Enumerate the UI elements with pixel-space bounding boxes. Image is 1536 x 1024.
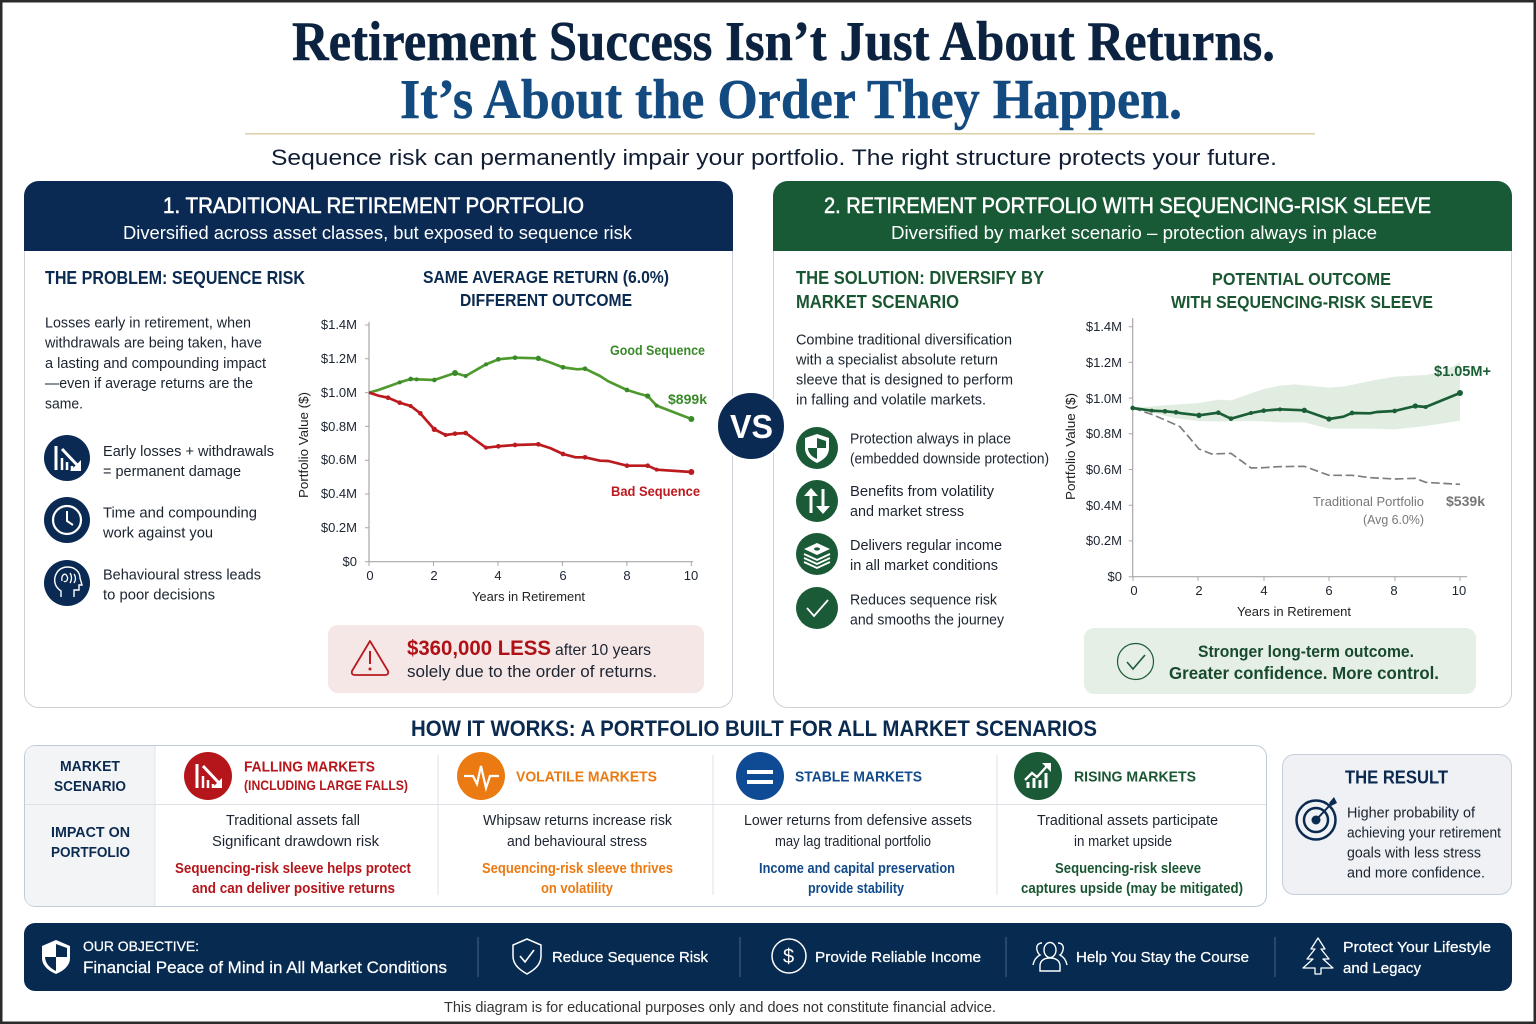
line chart: sleeve outcome: 0 (1130, 583, 1138, 598)
column: falling markets: and can deliver positive returns (192, 881, 395, 897)
row label: impact on portfolio: IMPACT ON (51, 825, 130, 841)
line chart: sleeve outcome: $0.4M (1086, 498, 1122, 513)
text: objective: OUR OBJECTIVE: (83, 938, 199, 954)
text block: problem description: Losses early in retirement, when (45, 316, 251, 332)
text: protection: (embedded downside protection) (850, 452, 1049, 468)
item: protect lifestyle and legacy (1303, 938, 1491, 977)
item: protect lifestyle and legacy: and Legacy (1343, 960, 1421, 977)
icon: check (796, 587, 838, 629)
line chart: good versus bad sequence: $0.8M (321, 419, 357, 434)
text: result description: goals with less stress (1347, 846, 1481, 862)
line chart: good versus bad sequence: $1.0M (321, 385, 357, 400)
line chart: sleeve outcome: (Avg 6.0%) (1363, 512, 1424, 527)
row label: market scenario: MARKET (60, 759, 120, 775)
text: behavioural stress (103, 568, 261, 604)
line chart: good versus bad sequence: 4 (494, 568, 502, 583)
column: stable markets: Income and capital preservation (759, 861, 955, 877)
text: benefits (850, 484, 995, 520)
item: reduce sequence risk: Reduce Sequence Risk (552, 949, 708, 966)
column: falling markets (175, 752, 411, 897)
panel: the result: THE RESULT (1345, 768, 1448, 788)
text: result description (1347, 806, 1501, 882)
text: early losses: = permanent damage (103, 464, 241, 480)
text: income (850, 538, 1002, 574)
column: volatile markets: Whipsaw returns increase risk (483, 813, 673, 829)
column: stable markets (736, 752, 972, 897)
text block: solution description (795, 332, 1013, 408)
line chart: sleeve outcome: $0.8M (1086, 426, 1122, 441)
item: reduce sequence risk (513, 939, 708, 974)
line chart: sleeve outcome: 10 (1452, 583, 1466, 598)
column: rising markets: in market upside (1074, 834, 1172, 850)
icon: circled check (1118, 644, 1154, 680)
row label: market scenario (54, 759, 126, 795)
text: time and compounding: work against you (102, 526, 213, 542)
panel header: sleeve (773, 181, 1512, 251)
VS badge: VS (730, 408, 773, 445)
line chart: sleeve outcome: $0.6M (1086, 462, 1122, 477)
line chart: good versus bad sequence: $0.4M (321, 486, 357, 501)
text block: solution description: sleeve that is designed to perform (796, 372, 1013, 388)
icon: falling chart (44, 435, 90, 481)
line chart: good versus bad sequence: Portfolio Value ($) (296, 392, 311, 498)
icon: target (1296, 797, 1337, 840)
text block: solution description: with a specialist absolute return (795, 352, 998, 368)
panel header: sleeve: 2. RETIREMENT PORTFOLIO WITH SEQUENCING-RISK SLEEVE (824, 193, 1431, 218)
subtitle: Sequence risk can permanently impair your portfolio. The right structure protects your future. (271, 145, 1277, 170)
item: provide reliable income: $ (783, 946, 794, 968)
text block: problem description: withdrawals are being taken, have (44, 336, 262, 352)
column: stable markets: may lag traditional portfolio (775, 834, 931, 850)
line chart: sleeve outcome: Portfolio Value ($) (1063, 393, 1078, 500)
text: early losses (103, 444, 274, 480)
icon: rising chart (1014, 752, 1062, 800)
text block: problem description: —even if average returns are the (45, 376, 253, 392)
item: help you stay the course (1033, 942, 1249, 971)
line chart: sleeve outcome: $1.2M (1086, 355, 1122, 370)
column: falling markets: Sequencing-risk sleeve helps protect (175, 861, 411, 877)
icon: objective shield (42, 940, 70, 974)
callout: stronger outcome (1084, 628, 1476, 694)
column: volatile markets: and behavioural stress (507, 834, 647, 850)
title: Retirement Success Isn’t Just About Returns. (292, 11, 1275, 73)
column: volatile markets: VOLATILE MARKETS (516, 768, 657, 786)
heading: potential outcome: POTENTIAL OUTCOME (1212, 269, 1391, 289)
line chart: sleeve outcome: $0 (1108, 569, 1122, 584)
line chart: good versus bad sequence: 2 (430, 568, 438, 583)
line chart: sleeve outcome: $1.4M (1086, 319, 1122, 334)
item: protect lifestyle and legacy: Protect Your Lifestyle (1343, 939, 1491, 956)
icon: head (44, 560, 90, 606)
line chart: good versus bad sequence (296, 317, 707, 604)
callout: stronger outcome: Stronger long-term outcome. (1198, 642, 1414, 661)
text: income: in all market conditions (850, 558, 998, 574)
item: provide reliable income (772, 939, 981, 973)
line chart: sleeve outcome (1063, 318, 1491, 619)
text: benefits: and market stress (850, 504, 964, 520)
heading: same average return: DIFFERENT OUTCOME (460, 290, 632, 310)
icon: volatile pulse (457, 752, 505, 800)
column: rising markets: Traditional assets participate (1037, 813, 1218, 829)
panel: traditional portfolio (24, 181, 733, 708)
text block: solution description: in falling and volatile markets. (796, 392, 986, 408)
text: reduces risk (850, 592, 1005, 628)
heading: the solution (796, 268, 1044, 312)
callout: 360,000 less (328, 625, 704, 693)
column: stable markets: Lower returns from defensive assets (744, 813, 972, 829)
icon: clock (44, 497, 90, 543)
line chart: good versus bad sequence: $0.2M (321, 520, 357, 535)
column: rising markets: captures upside (may be mitigated) (1021, 881, 1243, 897)
text: result description: Higher probability of (1347, 806, 1476, 822)
text: protection: Protection always in place (850, 432, 1011, 448)
column: stable markets: STABLE MARKETS (795, 768, 922, 786)
text: early losses: Early losses + withdrawals (103, 444, 274, 460)
text: time and compounding (102, 506, 257, 542)
column: falling markets: (INCLUDING LARGE FALLS) (244, 777, 408, 793)
panel header: sleeve: Diversified by market scenario – protection always in place (891, 223, 1377, 243)
callout: stronger outcome: Greater confidence. More control. (1169, 663, 1439, 683)
banner: our objective (24, 923, 1512, 991)
column: falling markets: Significant drawdown risk (212, 834, 380, 850)
text: reduces risk: and smooths the journey (850, 612, 1005, 628)
line chart: sleeve outcome: $1.0M (1086, 391, 1122, 406)
line chart: good versus bad sequence: 0 (366, 568, 374, 583)
line chart: good versus bad sequence: $899k (668, 391, 707, 407)
text: income: Delivers regular income (850, 538, 1002, 554)
column: rising markets (1014, 752, 1243, 897)
panel header: traditional (24, 181, 733, 251)
line chart: sleeve outcome: 8 (1390, 583, 1398, 598)
row label: market scenario: SCENARIO (54, 779, 126, 795)
text: reduces risk: Reduces sequence risk (850, 592, 998, 608)
column: falling markets: FALLING MARKETS (244, 758, 375, 776)
line chart: good versus bad sequence: Good Sequence (610, 343, 705, 358)
text: objective (83, 938, 447, 977)
panel: sequencing-risk sleeve portfolio (773, 181, 1512, 708)
text: benefits: Benefits from volatility (850, 484, 995, 500)
panel: the result (1282, 754, 1512, 894)
table: market scenarios (24, 746, 1266, 906)
callout: 360,000 less: after 10 years (555, 642, 651, 659)
heading: the solution: THE SOLUTION: DIVERSIFY BY (796, 268, 1044, 288)
line chart: good versus bad sequence: 6 (559, 568, 567, 583)
line chart: good versus bad sequence: Years in Retirement (472, 589, 585, 604)
heading: the problem: THE PROBLEM: SEQUENCE RISK (45, 268, 305, 288)
callout: 360,000 less: $360,000 LESS (407, 637, 551, 660)
item: provide reliable income: Provide Reliable Income (815, 949, 981, 966)
heading: same average return (423, 267, 669, 310)
icon: stack of cash (796, 533, 838, 575)
line chart: sleeve outcome: Traditional Portfolio (1313, 494, 1424, 509)
text: result description: and more confidence. (1347, 866, 1485, 882)
column: stable markets: provide stability (808, 881, 904, 897)
text: result description: achieving your retirement (1347, 826, 1501, 842)
VS badge (717, 392, 785, 460)
text: objective: Financial Peace of Mind in All Market Conditions (83, 958, 447, 977)
line chart: good versus bad sequence: $1.4M (321, 317, 357, 332)
line chart: sleeve outcome: 4 (1260, 583, 1268, 598)
title: It’s About the Order They Happen. (400, 69, 1182, 131)
line chart: sleeve outcome: 2 (1195, 583, 1203, 598)
column: rising markets: Sequencing-risk sleeve (1055, 861, 1201, 877)
icon: warning triangle (352, 641, 388, 675)
heading: the solution: MARKET SCENARIO (796, 292, 959, 312)
text block: problem description (44, 316, 266, 412)
text: protection (850, 432, 1049, 468)
icon: up down arrows (796, 480, 838, 522)
text: time and compounding: Time and compounding (103, 506, 257, 522)
line chart: good versus bad sequence: $0.6M (321, 452, 357, 467)
row label: impact on portfolio: PORTFOLIO (51, 845, 130, 861)
heading: how it works: HOW IT WORKS: A PORTFOLIO BUILT FOR ALL MARKET SCENARIOS (411, 716, 1097, 741)
text: behavioural stress: Behavioural stress leads (103, 568, 261, 584)
column: volatile markets (457, 752, 673, 897)
column: rising markets: RISING MARKETS (1074, 768, 1196, 786)
line chart: good versus bad sequence: $1.2M (321, 351, 357, 366)
line chart: good versus bad sequence: $0 (343, 554, 357, 569)
panel header: traditional: 1. TRADITIONAL RETIREMENT PORTFOLIO (163, 193, 584, 218)
row label: impact on portfolio (51, 825, 130, 861)
item: help you stay the course: Help You Stay the Course (1076, 949, 1249, 966)
text block: solution description: Combine traditional diversification (796, 332, 1012, 348)
icon: falling markets (184, 752, 232, 800)
callout: 360,000 less: solely due to the order of returns. (407, 662, 657, 681)
line chart: good versus bad sequence: 10 (684, 568, 698, 583)
text block: problem description: a lasting and compounding impact (45, 356, 266, 372)
icon: equals (736, 752, 784, 800)
column: volatile markets: on volatility (541, 881, 613, 897)
icon: shield (796, 427, 838, 469)
line chart: sleeve outcome: Years in Retirement (1237, 604, 1351, 619)
heading: same average return: SAME AVERAGE RETURN (6.0%) (423, 267, 669, 287)
text: behavioural stress: to poor decisions (103, 588, 215, 604)
heading: potential outcome (1171, 269, 1433, 312)
heading: potential outcome: WITH SEQUENCING-RISK SLEEVE (1171, 292, 1433, 312)
line chart: sleeve outcome: 6 (1325, 583, 1333, 598)
column: volatile markets: Sequencing-risk sleeve thrives (482, 861, 673, 877)
disclaimer: This diagram is for educational purposes only and does not constitute financial advice. (444, 1000, 996, 1016)
text block: problem description: same. (45, 396, 83, 412)
column: falling markets: Traditional assets fall (226, 813, 360, 829)
line chart: good versus bad sequence: 8 (623, 568, 631, 583)
panel header: traditional: Diversified across asset classes, but exposed to sequence risk (123, 223, 633, 243)
line chart: sleeve outcome: $0.2M (1086, 533, 1122, 548)
line chart: sleeve outcome: $539k (1446, 493, 1485, 509)
line chart: sleeve outcome: $1.05M+ (1434, 363, 1491, 380)
title (292, 11, 1275, 131)
line chart: good versus bad sequence: Bad Sequence (611, 484, 700, 499)
